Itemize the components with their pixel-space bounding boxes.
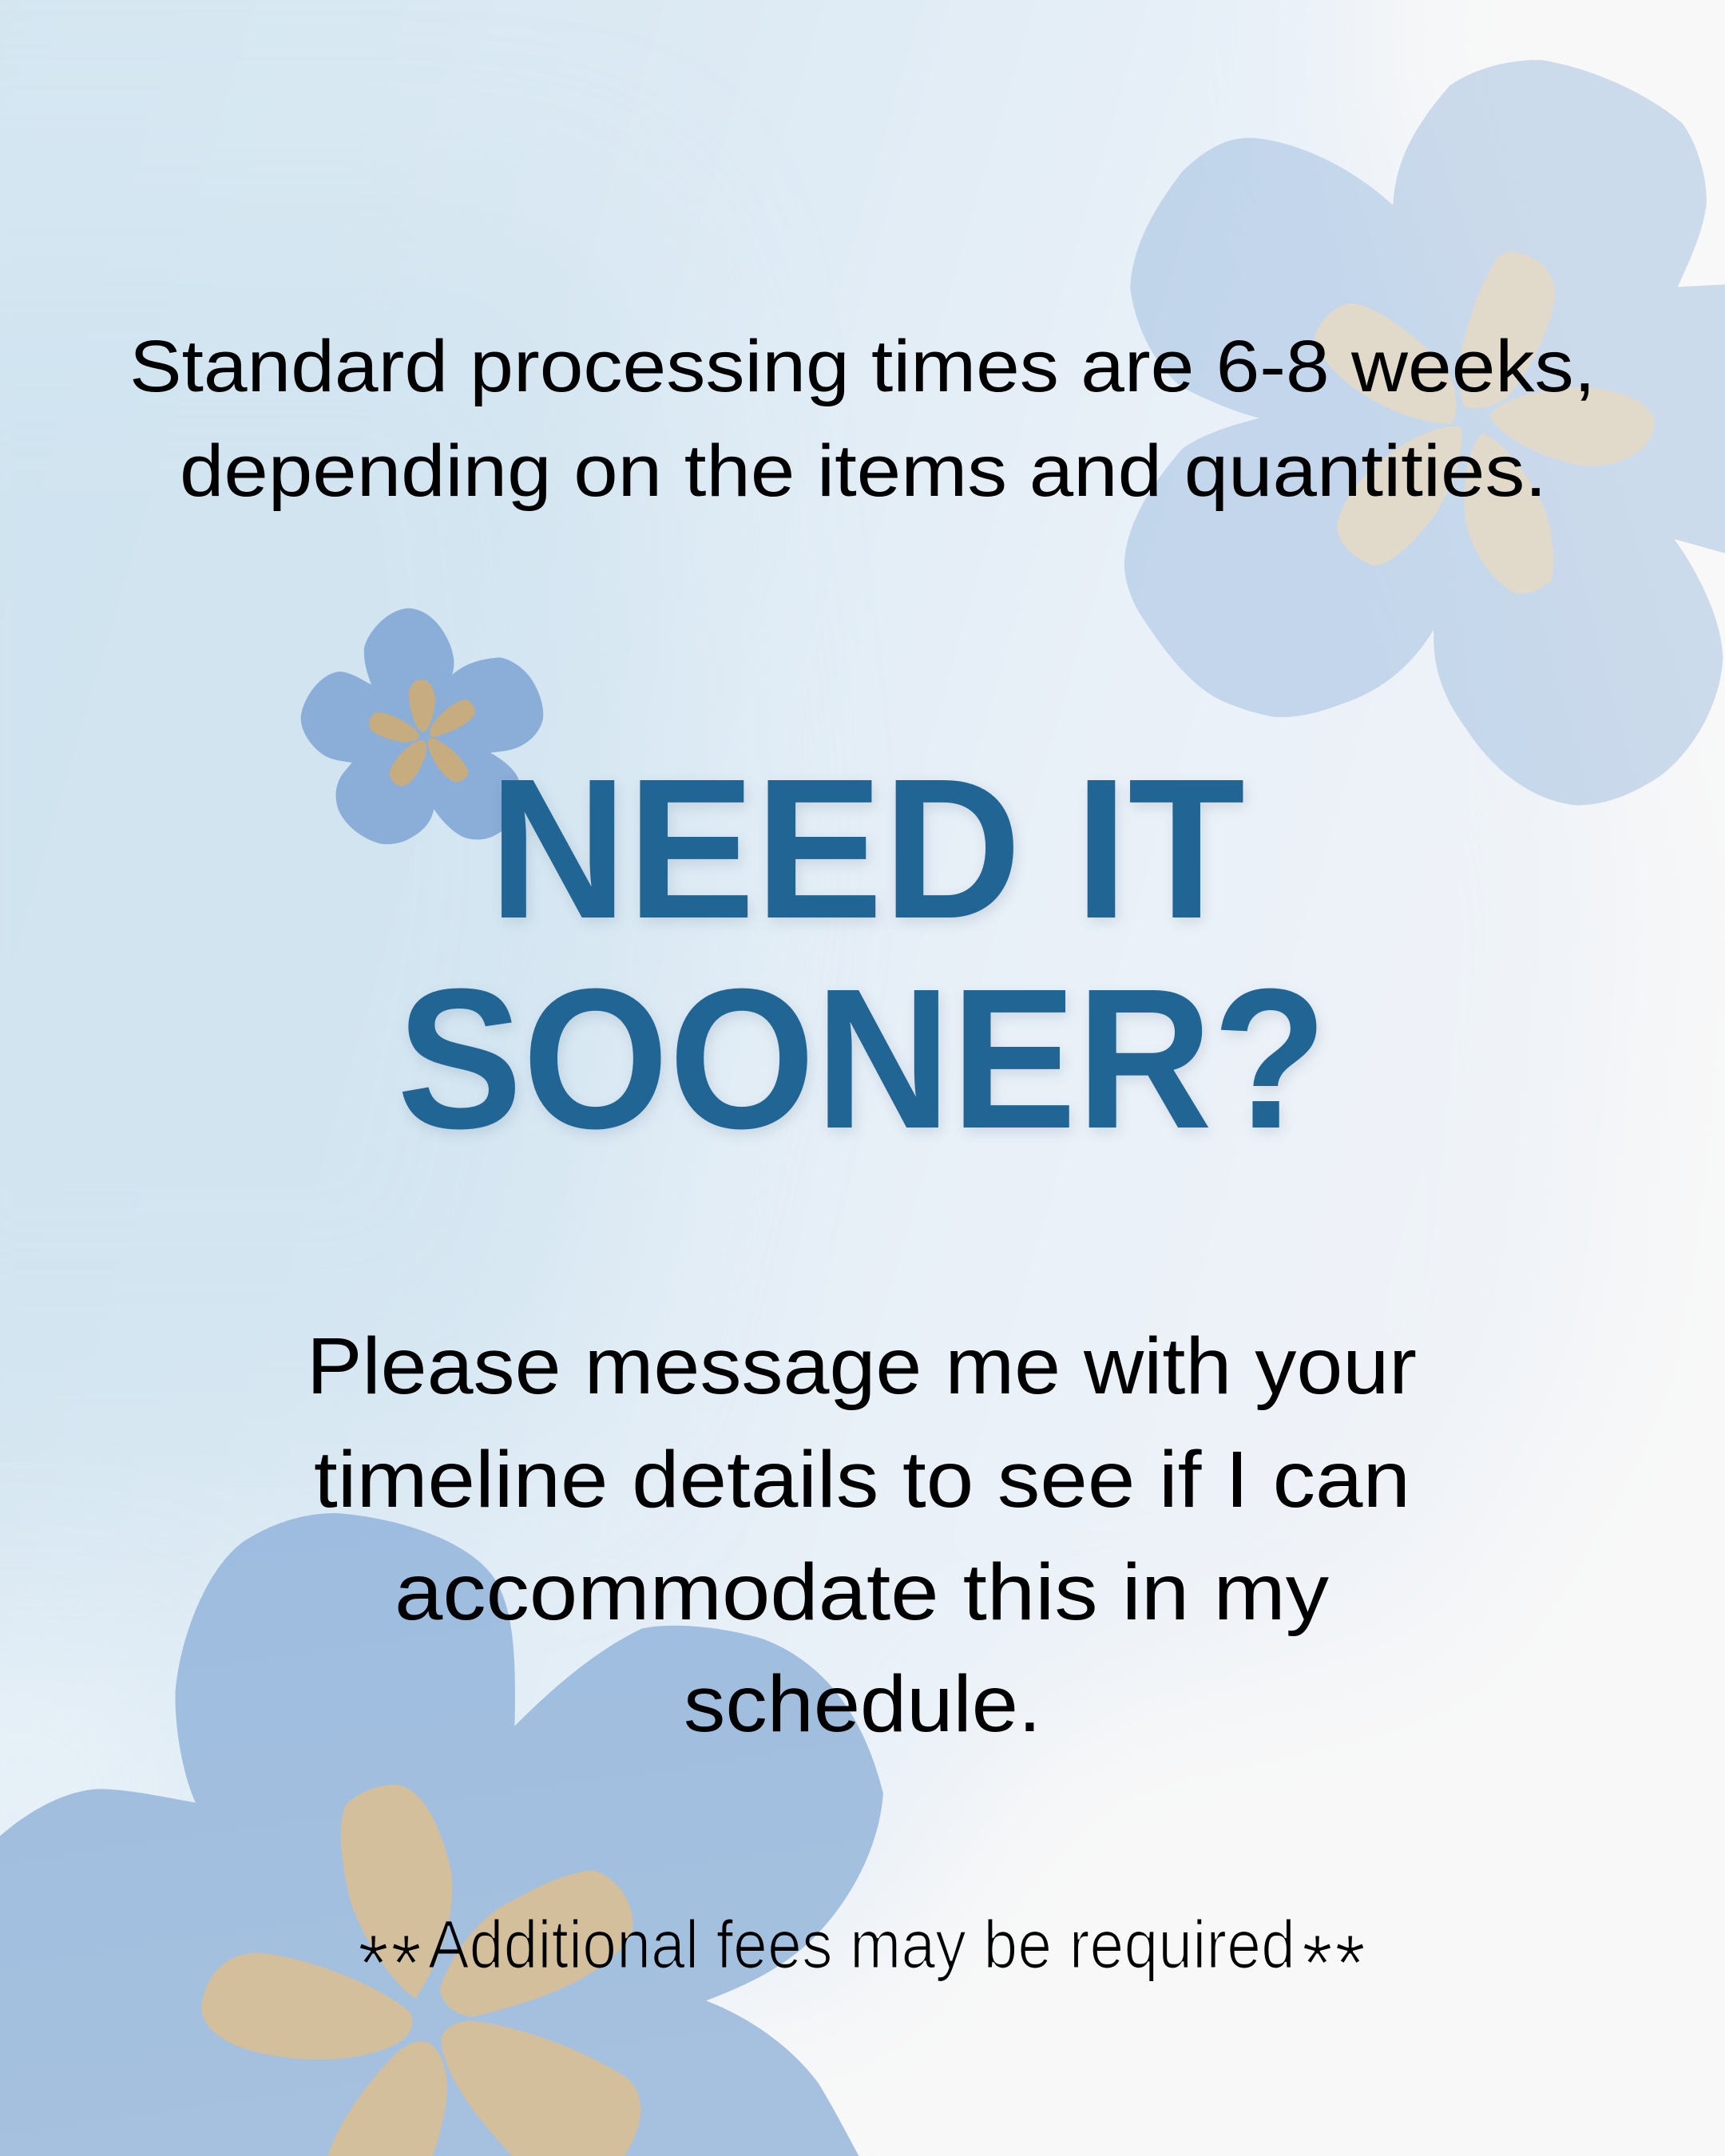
intro text: processing times: Standard processing times are 6-8 weeks, xyxy=(129,326,1596,407)
flower: bottom left, large xyxy=(0,1513,883,2156)
intro text: processing times xyxy=(129,326,1596,512)
body text: message request: accommodate this in my xyxy=(395,1548,1329,1637)
footnote: additional fees: ** xyxy=(1302,1919,1366,2008)
headline: need it sooner: NEED IT xyxy=(489,737,1245,960)
intro text: processing times: depending on the items and quantities. xyxy=(180,430,1547,512)
headline: need it sooner xyxy=(397,737,1327,1170)
body text: message request: timeline details to see if I can xyxy=(314,1435,1410,1524)
headline: need it sooner: SOONER? xyxy=(397,947,1327,1170)
footnote: additional fees: Additional fees may be required xyxy=(428,1907,1295,1982)
flower: top right, faded xyxy=(1124,60,1725,805)
body text: message request: Please message me with your xyxy=(307,1322,1417,1411)
footnote: additional fees: ** xyxy=(358,1919,422,2008)
body text: message request: schedule. xyxy=(684,1659,1041,1749)
body text: message request xyxy=(307,1322,1417,1749)
footnote: additional fees xyxy=(358,1907,1366,2008)
flower: small, behind headline xyxy=(301,608,543,844)
